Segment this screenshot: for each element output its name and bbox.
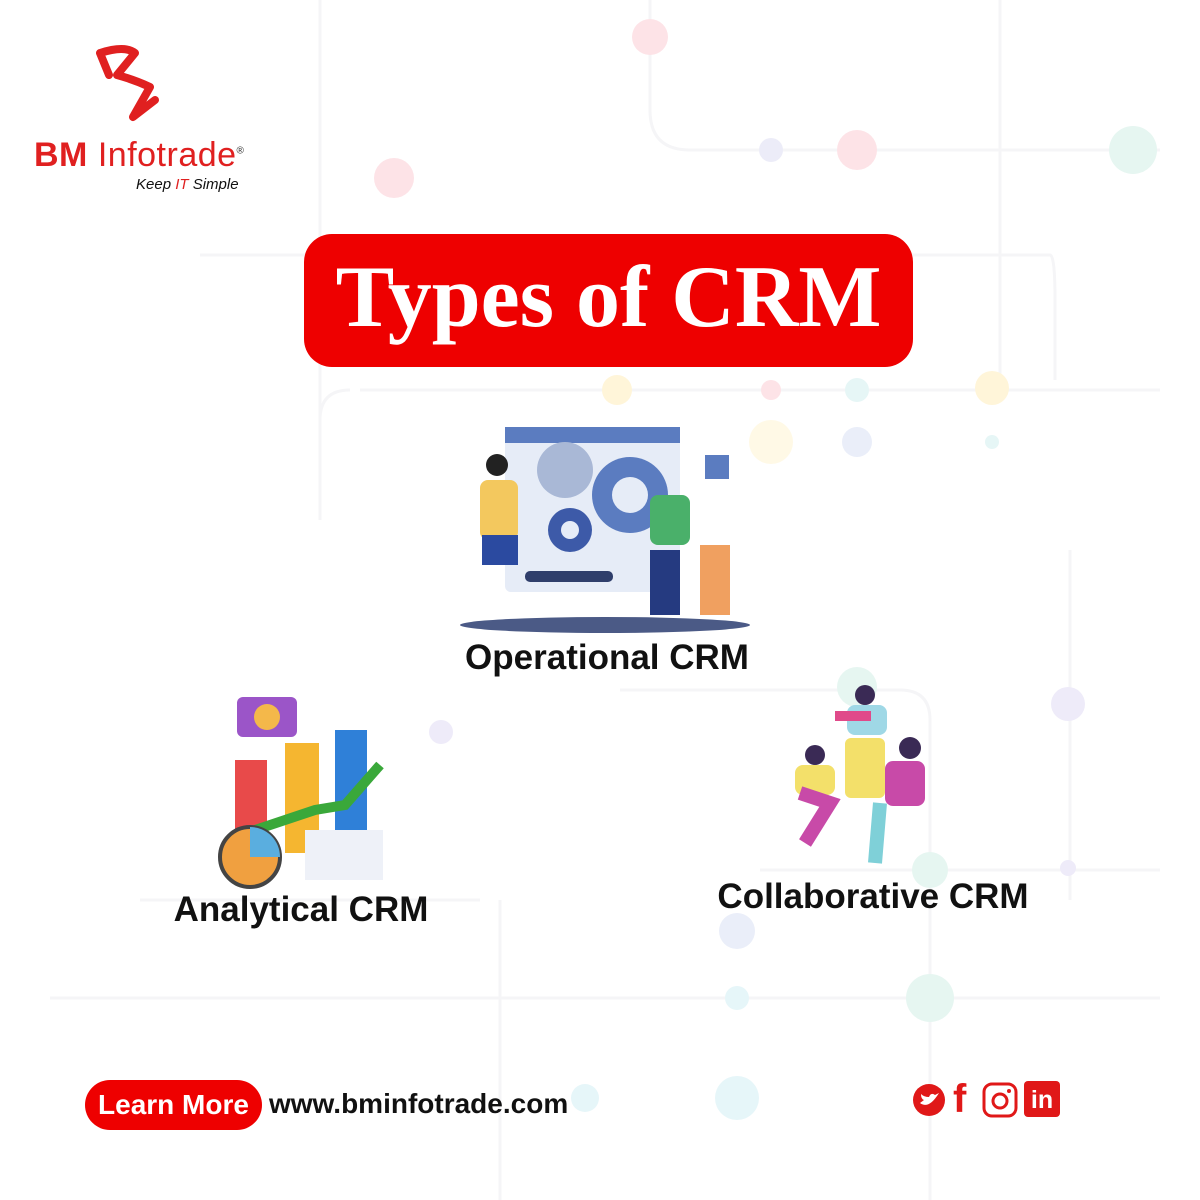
icon: twitter (913, 1084, 945, 1116)
label: analytical: Analytical CRM (174, 890, 428, 929)
footer: url: www.bminfotrade.com (269, 1088, 568, 1119)
icon: linkedin: in (1031, 1086, 1053, 1114)
title (304, 234, 913, 367)
logo (34, 45, 244, 193)
tagline: Keep IT Simple (136, 176, 239, 193)
icon: logo mark (96, 45, 159, 122)
brand name: BM Infotrade® (34, 136, 244, 174)
icon: facebook: f (953, 1077, 966, 1121)
illustration: collaborative (795, 685, 925, 864)
social icons (913, 1077, 1060, 1121)
title: Types of CRM (336, 249, 881, 346)
label: operational: Operational CRM (465, 638, 749, 677)
illustration: analytical (218, 697, 384, 889)
footer: learn more: Learn More (98, 1089, 249, 1120)
icon: linkedin (1024, 1081, 1060, 1117)
icon: instagram (982, 1082, 1018, 1118)
footer: learn more (85, 1080, 262, 1130)
label: collaborative: Collaborative CRM (717, 877, 1029, 916)
illustration: operational (460, 427, 750, 633)
